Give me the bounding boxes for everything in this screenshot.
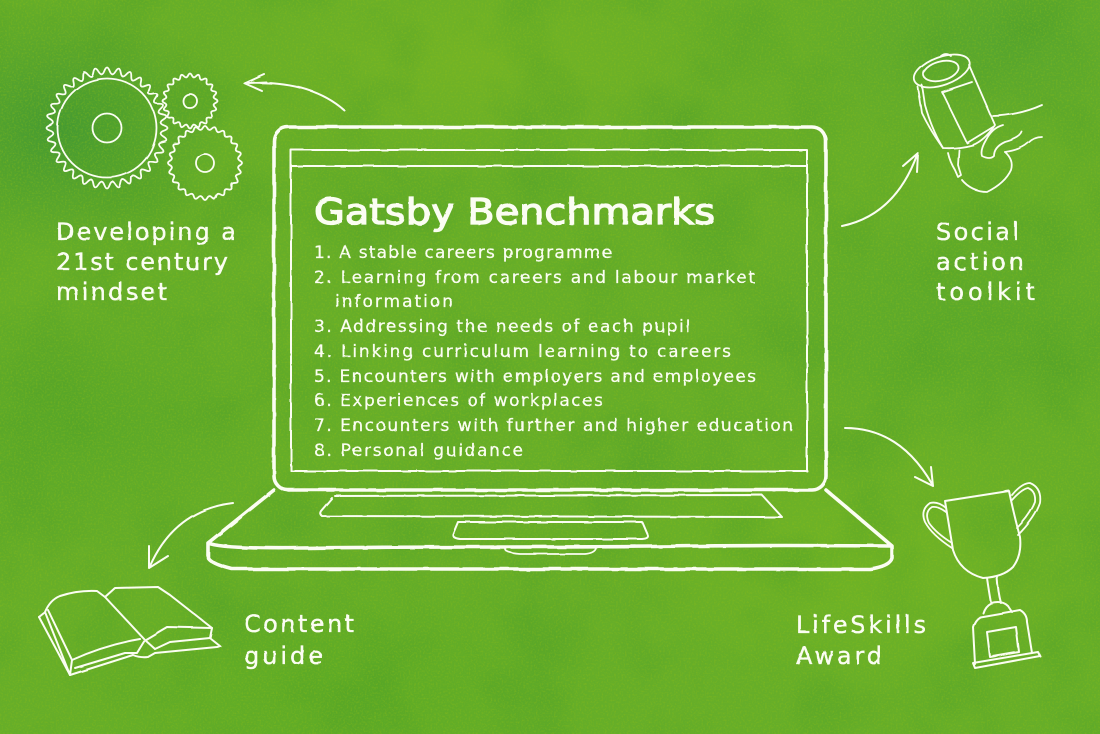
arrow: to trophy [845, 428, 933, 486]
label: developing a 21st century mindset [56, 218, 236, 306]
medium gear [166, 124, 244, 202]
icon: gears [37, 58, 244, 202]
benchmark list: 2. Learning from careers and labour market [314, 268, 755, 288]
label: content guide [244, 610, 354, 670]
large gear [37, 58, 177, 198]
arrow: to gears [244, 74, 344, 110]
arrow: to book [149, 503, 233, 568]
screen display area [291, 150, 807, 471]
label: content guide: Content [244, 610, 354, 638]
laptop base [208, 490, 892, 569]
label: social action toolkit: toolkit [936, 278, 1035, 306]
benchmark list [314, 243, 793, 461]
small gear [162, 74, 218, 128]
keyboard [320, 495, 782, 517]
benchmark list: 3. Addressing the needs of each pupil [314, 317, 690, 337]
benchmark list: 5. Encounters with employers and employees [314, 367, 756, 387]
label: social action toolkit: Social [936, 218, 1019, 246]
label: LifeSkills Award: Award [796, 642, 882, 670]
laptop screen frame [274, 127, 826, 490]
label: developing a 21st century mindset: mindset [56, 278, 167, 306]
hinge notch [505, 548, 596, 554]
label: social action toolkit: action [936, 248, 1024, 276]
icon: hand holding tin [910, 48, 1042, 192]
benchmark list: 8. Personal guidance [314, 441, 523, 461]
benchmark list: information [335, 292, 453, 312]
trackpad [453, 522, 648, 539]
icon: open book [39, 587, 220, 675]
arrow: to social action toolkit [842, 153, 918, 226]
label: LifeSkills Award: LifeSkills [796, 611, 926, 639]
label: developing a 21st century mindset: Developing a [56, 218, 236, 246]
label: social action toolkit [936, 218, 1035, 306]
benchmark list: 6. Experiences of workplaces [314, 391, 603, 411]
benchmark list: 7. Encounters with further and higher education [314, 416, 793, 436]
laptop screen text [314, 192, 793, 461]
label: content guide: guide [244, 642, 323, 670]
label: LifeSkills Award [796, 611, 926, 670]
benchmark list: 4. Linking curriculum learning to careers [314, 342, 731, 362]
label: developing a 21st century mindset: 21st century [56, 248, 228, 276]
benchmark list: 1. A stable careers programme [314, 243, 612, 263]
icon: trophy [923, 483, 1040, 668]
laptop [208, 127, 892, 569]
heading: Gatsby Benchmarks [314, 192, 715, 233]
